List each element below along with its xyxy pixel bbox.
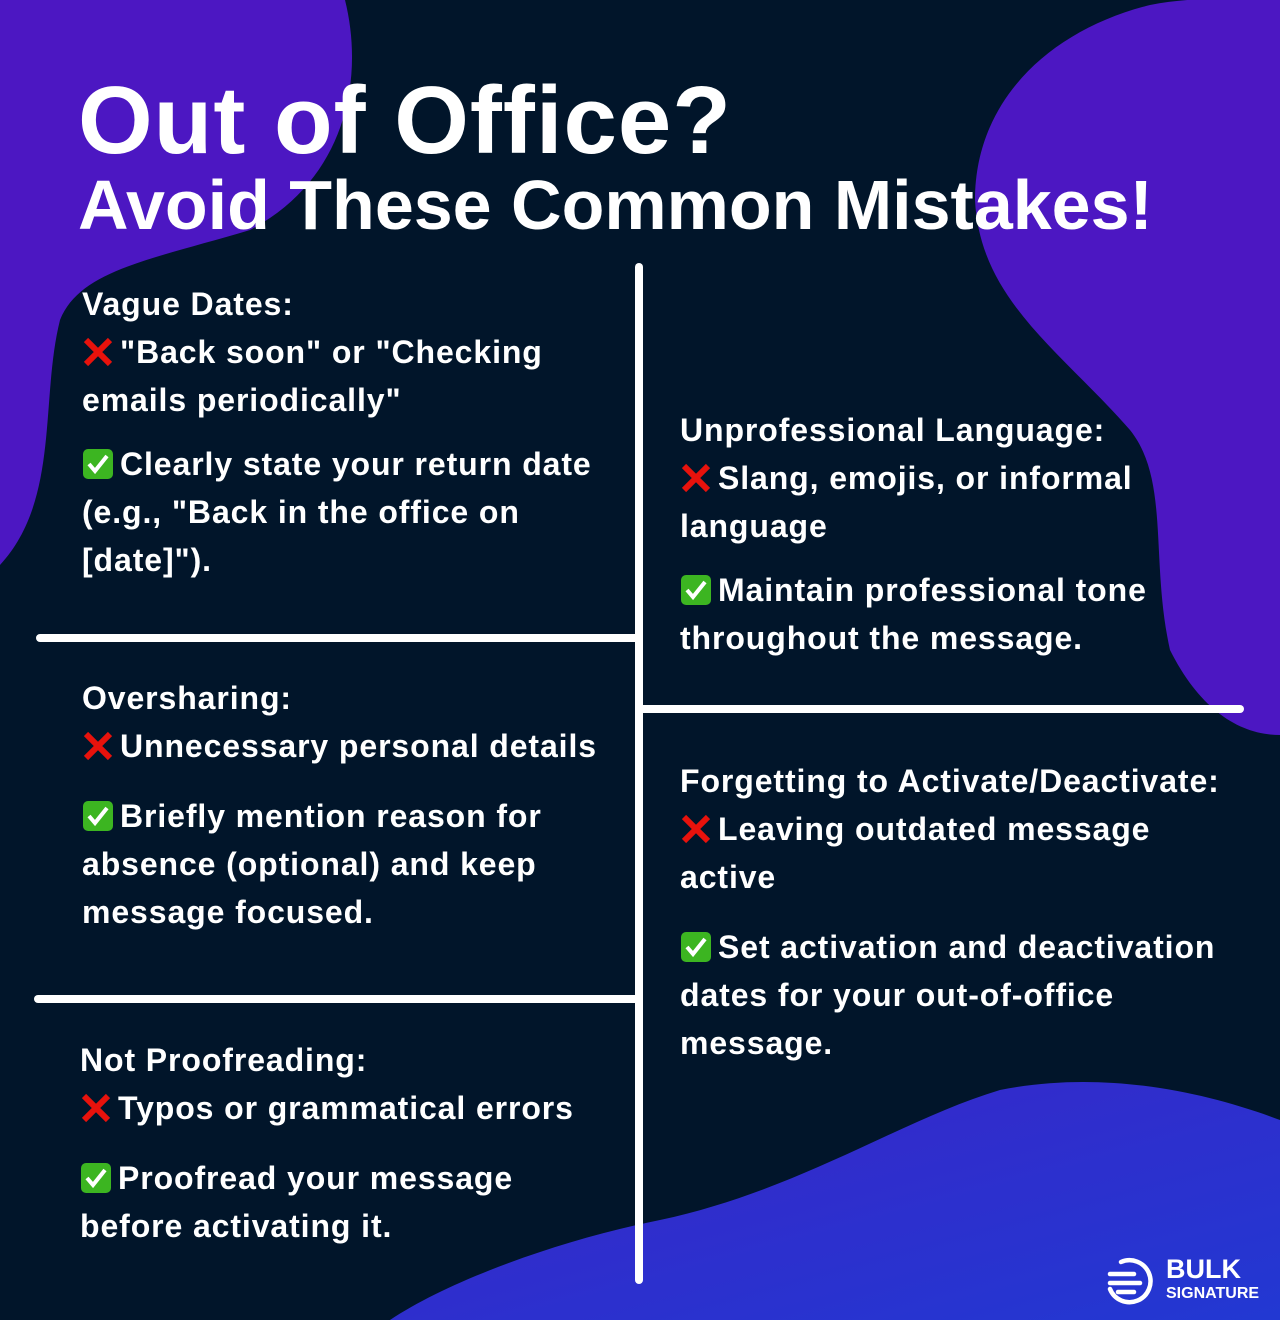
panel: not proofreading: before activating it. (80, 1208, 392, 1244)
panel: oversharing (82, 680, 597, 930)
panel: vague dates: emails periodically" (82, 382, 402, 418)
panel: forgetting to activate: Set activation and deactivation (718, 929, 1215, 965)
panel: unprofessional language (680, 412, 1147, 656)
subtitle: Avoid These Common Mistakes! (78, 166, 1153, 244)
panel: vague dates: (e.g., "Back in the office on (82, 494, 520, 530)
panel: vague dates: "Back soon" or "Checking (120, 334, 543, 370)
panel: vague dates (82, 286, 592, 578)
panel: oversharing: Briefly mention reason for (120, 798, 542, 834)
panel: forgetting to activate: Leaving outdated message (718, 811, 1150, 847)
panel: not proofreading: Typos or grammatical errors (118, 1090, 574, 1126)
panel: oversharing: message focused. (82, 894, 374, 930)
title: Out of Office? (78, 67, 732, 174)
panel: vague dates: Vague Dates: (82, 286, 294, 322)
panel: not proofreading: Proofread your message (118, 1160, 513, 1196)
panel: oversharing: Oversharing: (82, 680, 292, 716)
panel: unprofessional language: Maintain professional tone (718, 572, 1147, 608)
panel: oversharing: Unnecessary personal details (120, 728, 597, 764)
panel: forgetting to activate: dates for your out-of-office (680, 977, 1114, 1013)
panel: not proofreading (80, 1042, 574, 1244)
logo (1108, 1254, 1259, 1304)
panel: unprofessional language: throughout the message. (680, 620, 1083, 656)
panel: vague dates: [date]"). (82, 542, 212, 578)
panel: forgetting to activate: active (680, 859, 776, 895)
panel: oversharing: absence (optional) and keep (82, 846, 537, 882)
panel: not proofreading: Not Proofreading: (80, 1042, 367, 1078)
panel: forgetting to activate: message. (680, 1025, 833, 1061)
logo: BULK (1166, 1254, 1241, 1284)
logo: SIGNATURE (1166, 1285, 1259, 1302)
panel: unprofessional language: Unprofessional Language: (680, 412, 1105, 448)
panel: unprofessional language: Slang, emojis, or informal (718, 460, 1133, 496)
panel: forgetting to activate (680, 763, 1220, 1061)
panel: vague dates: Clearly state your return date (120, 446, 592, 482)
panel: forgetting to activate: Forgetting to Activate/Deactivate: (680, 763, 1220, 799)
panel: unprofessional language: language (680, 508, 828, 544)
